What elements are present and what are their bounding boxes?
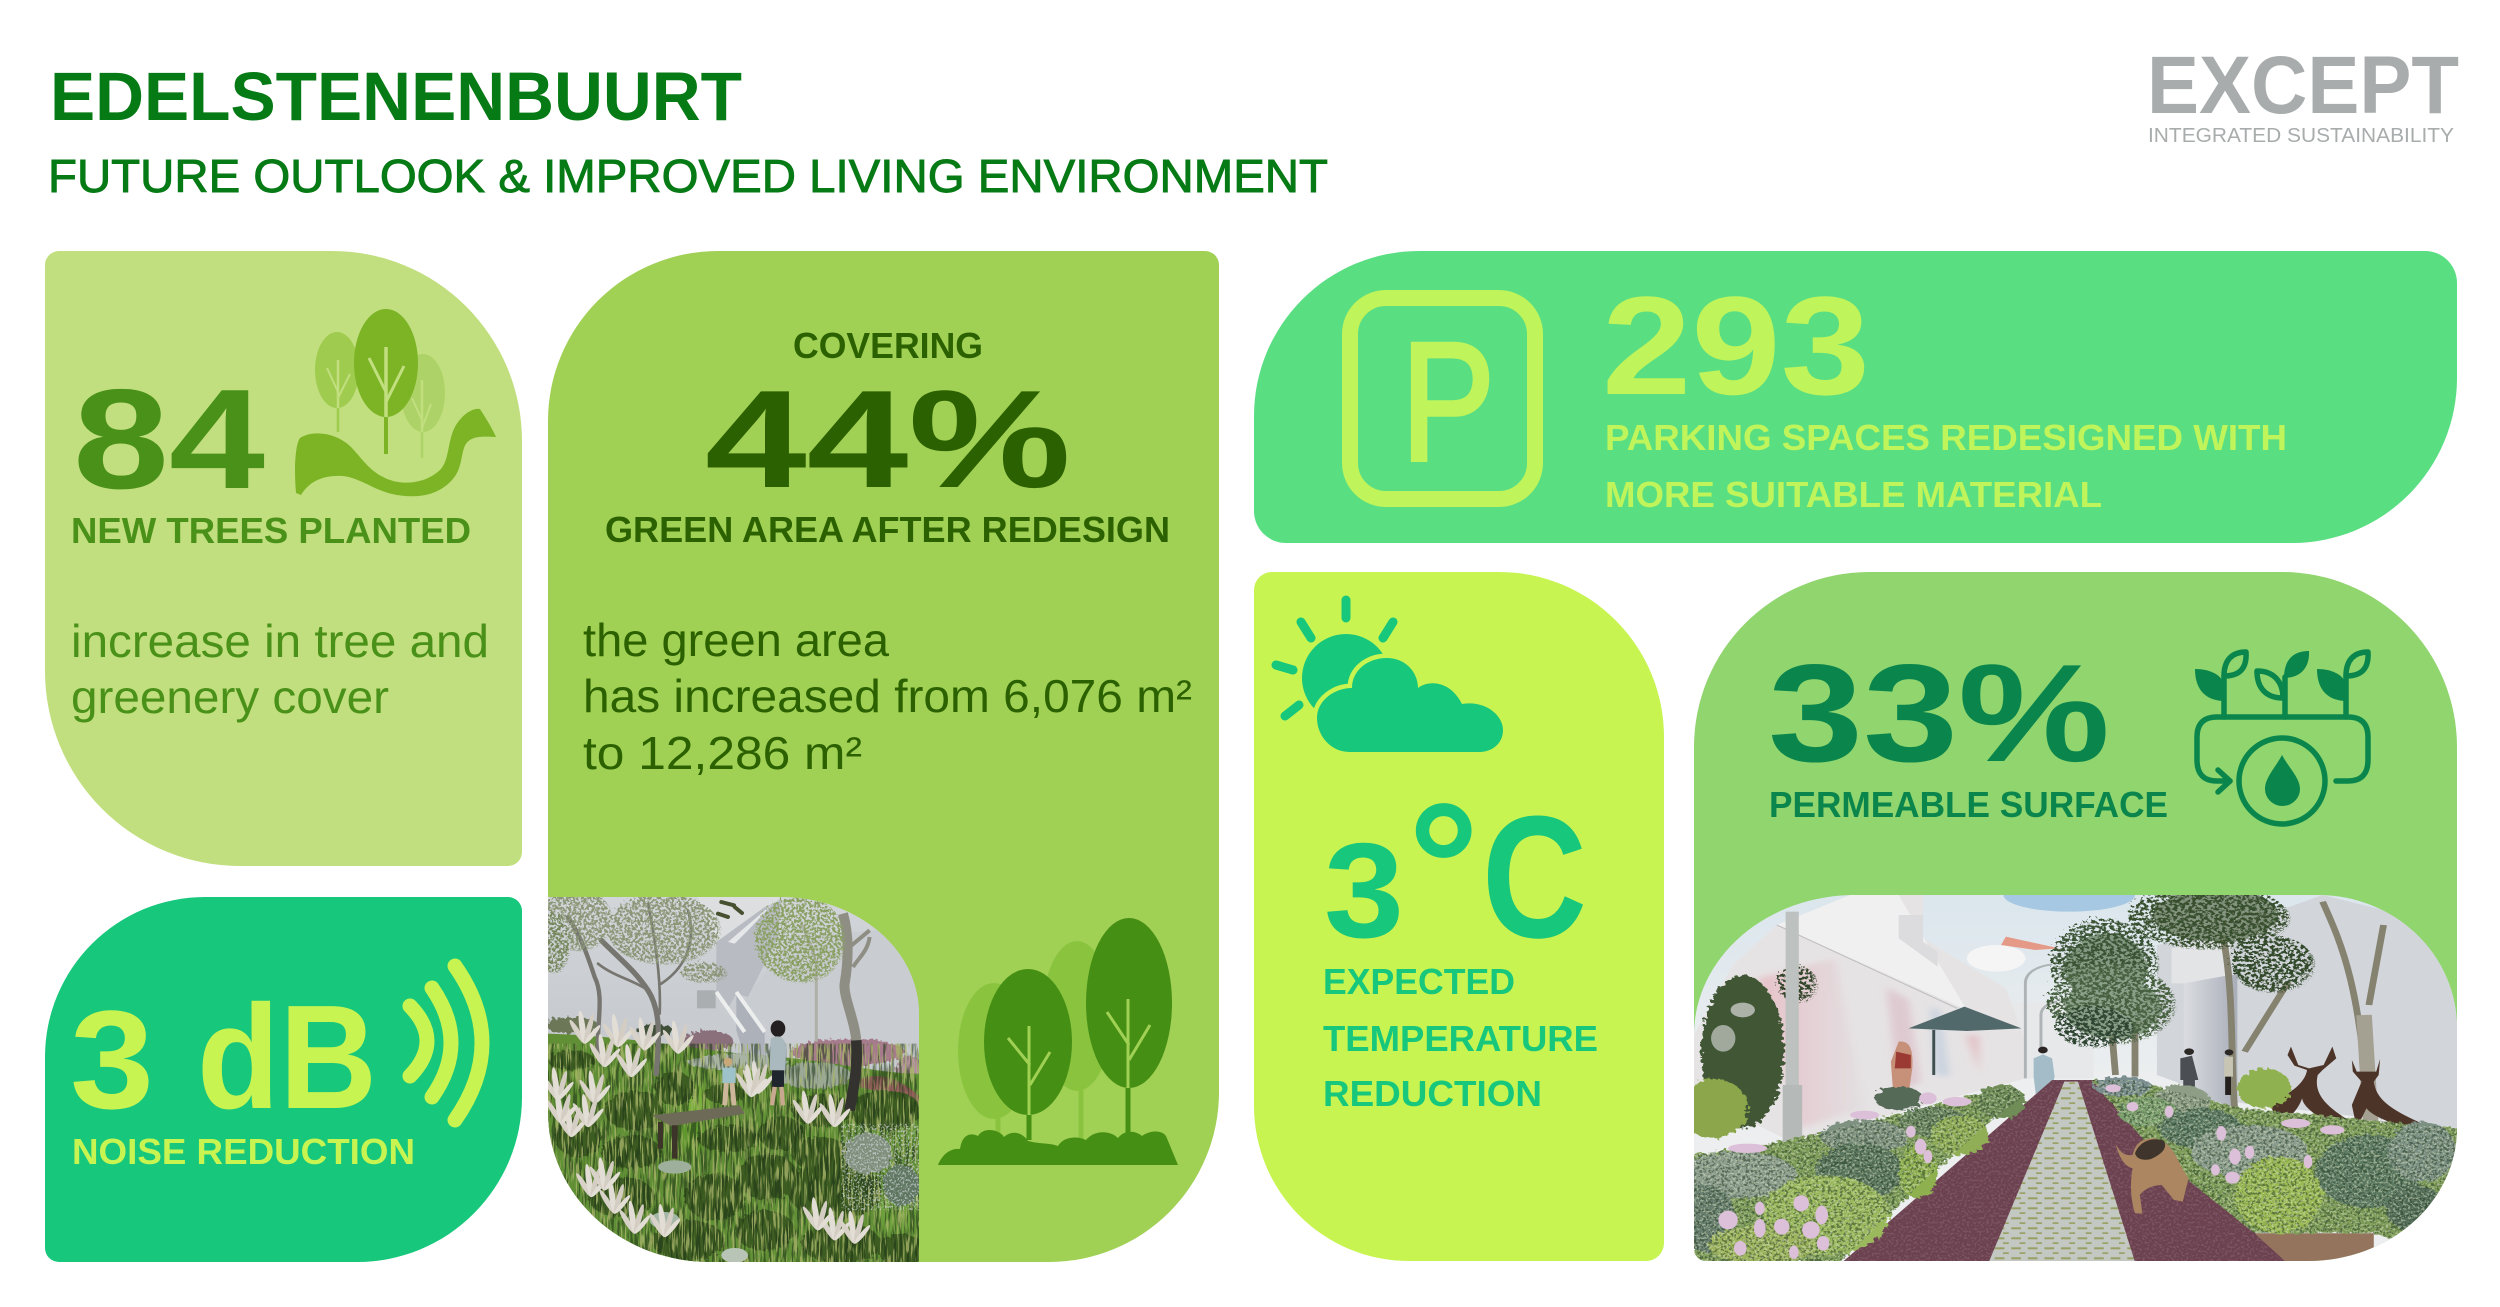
icon: group of trees xyxy=(938,918,1178,1165)
text: green area description: the green area xyxy=(583,614,889,666)
number: 3°C: ° xyxy=(1408,766,1479,965)
number: 3°C: C xyxy=(1482,779,1587,974)
text: green area description: has increased from 6,076 m² xyxy=(583,670,1192,722)
label: expected temperature reduction: TEMPERATURE xyxy=(1323,1018,1598,1059)
label: expected temperature reduction: REDUCTION xyxy=(1323,1073,1542,1114)
icon: plants and water cycle xyxy=(2195,651,2368,824)
logo: Except Integrated Sustainability: INTEGRATED SUSTAINABILITY xyxy=(2148,125,2454,147)
text: tree cover description: increase in tree and xyxy=(71,615,489,667)
label: noise reduction: NOISE REDUCTION xyxy=(72,1131,415,1172)
left wall xyxy=(1694,895,2025,1142)
grass tufts xyxy=(548,1050,925,1267)
icon: parking sign xyxy=(1350,298,1535,499)
label: permeable surface: PERMEABLE SURFACE xyxy=(1769,784,2168,825)
photo: pedestrian street with planting xyxy=(1677,878,2458,1265)
icon: sound waves xyxy=(410,966,482,1120)
label: expected temperature reduction: EXPECTED xyxy=(1323,961,1515,1002)
number: 44%: 44% xyxy=(705,362,1071,517)
planting right xyxy=(2092,1067,2457,1240)
label: parking spaces redesigned: PARKING SPACES REDESIGNED WITH xyxy=(1605,417,2287,458)
photo: garden with tall grasses xyxy=(538,889,925,1267)
blooming meadow xyxy=(688,1054,851,1089)
parasol xyxy=(1908,1007,2021,1031)
number: 3 dB: dB xyxy=(197,975,377,1140)
label: green area after redesign: GREEN AREA AFTER REDESIGN xyxy=(605,509,1170,550)
right wall xyxy=(2157,895,2458,1128)
icon: sun behind cloud xyxy=(1276,600,1503,752)
trees xyxy=(568,904,816,1074)
number: 293: 293 xyxy=(1602,267,1870,424)
number: 33%: 33% xyxy=(1768,636,2110,791)
people xyxy=(1890,1042,2234,1095)
number: 3 dB xyxy=(70,975,377,1140)
logo: Except Integrated Sustainability: EXCEPT xyxy=(2147,40,2459,131)
water reflections xyxy=(658,1160,691,1174)
number: 3°C xyxy=(1324,766,1587,974)
number: 3°C: 3 xyxy=(1324,815,1404,966)
dog xyxy=(2116,1138,2189,1213)
planting left xyxy=(1677,1078,2025,1265)
panel: permeable surface xyxy=(1677,572,2458,1265)
text: tree cover description: greenery cover xyxy=(71,671,389,723)
subtitle: FUTURE OUTLOOK & IMPROVED LIVING ENVIRONMENT xyxy=(48,150,1328,202)
plumes xyxy=(603,1014,634,1048)
title: EDELSTENENBUURT xyxy=(50,58,742,135)
lamp post xyxy=(1786,912,1799,1145)
panel: parking spaces xyxy=(1254,251,2457,543)
lawn highlights xyxy=(555,1067,916,1234)
icon: parking sign: P xyxy=(1401,307,1495,496)
ground xyxy=(548,1034,920,1264)
vine xyxy=(1701,975,1784,1128)
bench xyxy=(652,1105,745,1126)
woman and child xyxy=(722,1020,786,1105)
road and paver strip xyxy=(1843,1080,2286,1262)
label: parking spaces redesigned xyxy=(1605,417,2287,515)
flowers xyxy=(1718,1084,2345,1259)
hedges xyxy=(548,1016,919,1074)
panel: new trees planted xyxy=(45,251,522,866)
trees xyxy=(2112,902,2384,1128)
icon: trees on a wave xyxy=(295,309,496,496)
text: green area description xyxy=(583,614,1192,779)
panel: green area after redesign xyxy=(538,251,1219,1267)
panel: temperature reduction xyxy=(1254,572,1664,1261)
number: 84: 84 xyxy=(73,360,265,519)
deer sculpture xyxy=(2272,1046,2346,1120)
panel: noise reduction xyxy=(45,897,522,1262)
label: new trees planted: NEW TREES PLANTED xyxy=(71,510,471,551)
label: parking spaces redesigned: MORE SUITABLE MATERIAL xyxy=(1605,474,2102,515)
text: green area description: to 12,286 m² xyxy=(583,727,862,779)
grass blades texture xyxy=(548,1044,920,1264)
number: 3 dB: 3 xyxy=(70,981,154,1138)
label: covering: COVERING xyxy=(793,325,983,366)
foliage texture left and right xyxy=(1694,1080,2458,1262)
flowering shrubs xyxy=(844,1133,920,1206)
text: tree cover description xyxy=(71,615,489,723)
label: expected temperature reduction xyxy=(1323,961,1598,1114)
